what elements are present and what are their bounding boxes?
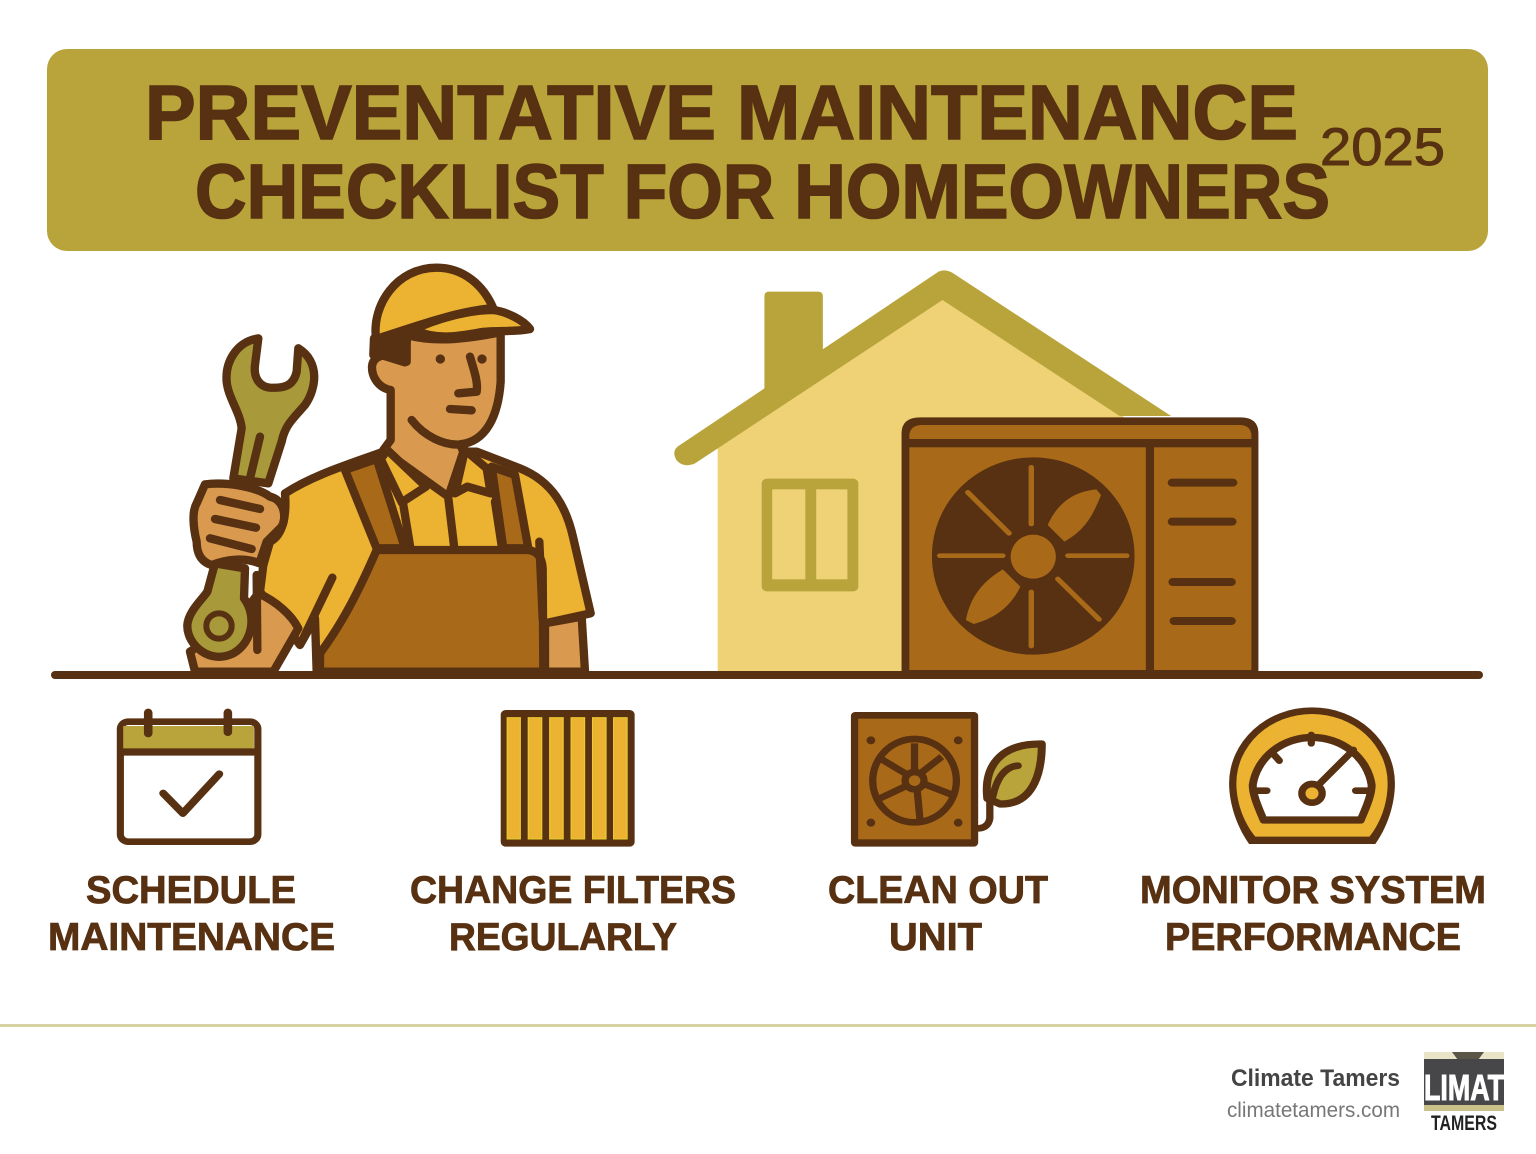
title: CHECKLIST FOR HOMEOWNERS (195, 149, 1330, 235)
label: change filters regularly: REGULARLY (449, 916, 677, 959)
footer logo (1424, 1052, 1504, 1135)
outdoor AC unit (902, 417, 1258, 673)
right forearm (545, 617, 585, 672)
label: monitor system performance: MONITOR SYSTEM (1140, 869, 1486, 912)
icon: gauge (1229, 707, 1395, 844)
icon: calendar (120, 713, 258, 842)
label: change filters regularly: CHANGE FILTERS (410, 869, 736, 912)
wrench ring hole (206, 613, 232, 639)
neck and face (372, 332, 501, 497)
footer logo: LIMAT (1424, 1067, 1504, 1108)
title: PREVENTATIVE MAINTENANCE (145, 70, 1298, 156)
apron (320, 550, 543, 672)
label: schedule maintenance: SCHEDULE (86, 869, 296, 912)
icon: filter (501, 710, 635, 847)
label: schedule maintenance: MAINTENANCE (48, 916, 335, 959)
label: clean out unit: UNIT (889, 916, 982, 959)
label: monitor system performance (1140, 869, 1486, 959)
footer brand text: climatetamers.com (1227, 1099, 1400, 1122)
chimney (764, 292, 823, 393)
nose, mouth and jaw (412, 357, 477, 445)
window (762, 479, 858, 591)
year: 2025 (1320, 118, 1445, 177)
fan (932, 457, 1135, 655)
technician illustration (187, 268, 591, 672)
sleeve folds (302, 542, 543, 642)
icon: outdoor unit with leaf (851, 712, 1042, 847)
house (674, 270, 1258, 673)
left forearm (190, 593, 298, 672)
label: clean out unit: CLEAN OUT (828, 869, 1048, 912)
cap (376, 268, 493, 338)
shirt (260, 452, 591, 672)
footer brand text: Climate Tamers (1231, 1065, 1400, 1092)
ground line (51, 671, 1483, 679)
shirt placket (403, 498, 502, 546)
wrench (227, 338, 314, 483)
eyes (436, 354, 487, 364)
hand (194, 484, 284, 565)
footer logo: TAMERS (1431, 1112, 1497, 1135)
collar (381, 450, 491, 502)
vent slots (1172, 483, 1233, 621)
fingers (210, 500, 260, 650)
cap brim (413, 310, 530, 337)
footer brand text (1227, 1065, 1400, 1122)
hair (373, 334, 407, 362)
wrench ring (187, 563, 251, 657)
wrench slot (250, 437, 260, 478)
apron straps (345, 459, 528, 548)
wall (718, 297, 1124, 672)
label: monitor system performance: PERFORMANCE (1165, 916, 1461, 959)
title banner (47, 49, 1488, 251)
label: clean out unit (828, 869, 1048, 959)
title (145, 70, 1330, 235)
label: schedule maintenance (48, 869, 335, 959)
roof (674, 270, 1171, 465)
label: change filters regularly (410, 869, 736, 959)
